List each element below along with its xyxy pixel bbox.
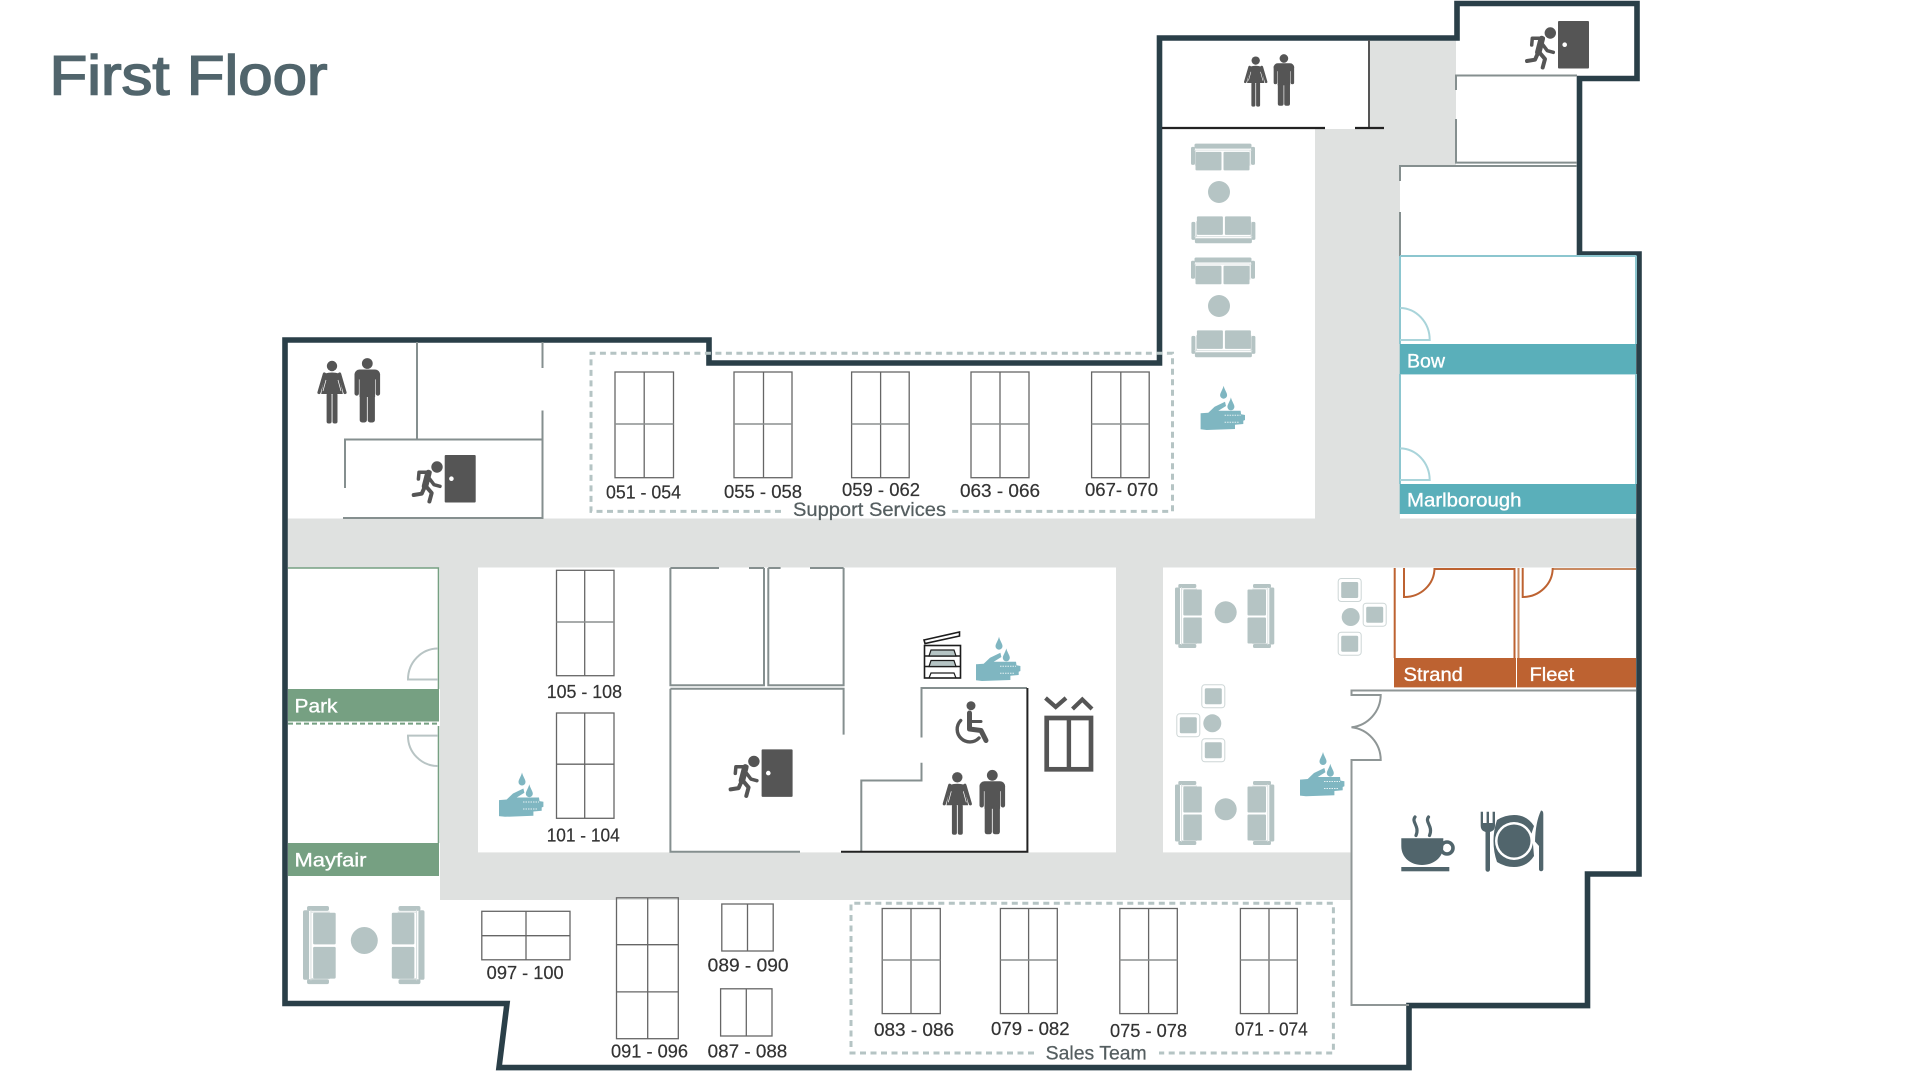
icon: man toilet top [1274, 54, 1294, 106]
sofa 2 [1191, 216, 1255, 243]
panel: room Park [288, 568, 439, 722]
panel: desks 097 - 100 [482, 911, 570, 983]
panel: room Mayfair [288, 726, 439, 876]
desks 051 - 054 [615, 372, 674, 478]
divider [288, 723, 438, 725]
panel: desks 105 - 108 [547, 570, 622, 702]
icon: woman toilet top [1245, 56, 1266, 107]
panel: top toilets [1162, 40, 1384, 128]
icon: plate and cutlery [1481, 810, 1543, 872]
icon: wheelchair [957, 701, 986, 742]
room name: Park [294, 696, 338, 718]
panel: desks 091 - 096 [611, 898, 688, 1062]
band [1400, 484, 1636, 514]
door [408, 648, 438, 680]
door [1523, 568, 1553, 597]
door [1400, 308, 1430, 340]
panel: central rooms [670, 568, 1027, 852]
room name: Strand [1404, 664, 1463, 686]
room name: Bow [1407, 350, 1446, 372]
panel: desks 089 - 090 [708, 904, 788, 976]
heading: Sales Team: Sales Team [1046, 1044, 1147, 1064]
table [1215, 601, 1237, 623]
panel: room Fleet [1517, 568, 1636, 687]
label: 105 - 108 [547, 682, 622, 702]
icon: copier [924, 632, 960, 678]
sofa [1175, 584, 1202, 648]
panel: Support Services [591, 353, 1172, 521]
sofa right [392, 906, 424, 984]
icon: emergency exit centre [731, 749, 793, 797]
room name: Mayfair [294, 850, 367, 872]
label 055 - 058: 055 - 058 [724, 482, 802, 502]
icon: lift [1046, 698, 1092, 769]
heading: Support Services: Support Services [793, 500, 946, 521]
band [1400, 344, 1636, 374]
icon: hand wash column [1201, 386, 1245, 430]
panel: east breakout [1175, 578, 1386, 845]
icon: hand wash left [499, 772, 543, 817]
label 063 - 066: 063 - 066 [960, 481, 1040, 501]
desks 055 - 058 [734, 372, 792, 478]
door [408, 736, 438, 766]
icon: woman toilet [319, 361, 345, 424]
sofa 4 [1191, 330, 1255, 357]
icon: hand wash east [1300, 752, 1344, 796]
desks 059 - 062 [852, 372, 909, 478]
icon: emergency exit top right [1527, 21, 1589, 68]
desks 063 - 066 [971, 372, 1029, 478]
chair cluster upper [1338, 578, 1386, 655]
panel: lower left sofas [303, 906, 424, 984]
icon: woman toilet centre [944, 772, 970, 835]
band [1517, 658, 1636, 687]
icon: man toilet centre [980, 770, 1005, 834]
chair cluster lower [1177, 685, 1225, 762]
label: 089 - 090 [708, 956, 788, 976]
label 067- 070: 067- 070 [1085, 480, 1158, 500]
panel: room Bow [1400, 256, 1636, 374]
label: 101 - 104 [547, 826, 620, 846]
label: 087 - 088 [708, 1042, 787, 1062]
room name: Fleet [1530, 664, 1575, 686]
label 079 - 082: 079 - 082 [991, 1019, 1070, 1039]
label 083 - 086: 083 - 086 [874, 1020, 954, 1040]
panel: room Strand [1394, 568, 1516, 687]
label 071 - 074: 071 - 074 [1235, 1020, 1308, 1040]
icon: man toilet [354, 358, 380, 422]
icon: emergency exit [414, 455, 476, 502]
band [288, 843, 439, 876]
sofa 3 [1191, 258, 1255, 284]
desks 071 - 074 [1240, 908, 1297, 1014]
label 051 - 054: 051 - 054 [606, 482, 681, 502]
door [1400, 448, 1430, 480]
desks 075 - 078 [1120, 908, 1177, 1014]
corridors [288, 40, 1637, 900]
table 1 [1208, 181, 1230, 203]
room outlines upper right [1400, 76, 1577, 256]
sofa [1175, 781, 1202, 845]
label: 091 - 096 [611, 1042, 688, 1062]
outer wall [285, 4, 1639, 1068]
icon: hand wash centre [976, 637, 1020, 681]
label 075 - 078: 075 - 078 [1110, 1021, 1187, 1041]
room name: Marlborough [1407, 490, 1522, 512]
label: 097 - 100 [487, 963, 564, 983]
label 059 - 062: 059 - 062 [842, 480, 920, 500]
panel: desks 101 - 104 [547, 713, 620, 846]
table [351, 927, 378, 954]
desks 079 - 082 [1000, 908, 1057, 1014]
sofa 1 [1191, 144, 1255, 170]
icon: coffee cup [1401, 817, 1453, 871]
sofa [1248, 781, 1274, 845]
desks 067 - 070 [1092, 372, 1149, 478]
door [1404, 568, 1434, 597]
panel: breakout column sofas [1191, 144, 1255, 357]
sofa left [303, 906, 336, 984]
panel: upper left toilets and exit room [319, 342, 542, 518]
panel: restaurant [1352, 690, 1636, 1005]
panel: desks 087 - 088 [708, 989, 787, 1062]
title: First Floor [50, 44, 328, 106]
table 2 [1208, 295, 1230, 317]
table [1215, 798, 1237, 820]
band [1394, 658, 1516, 687]
band [288, 689, 439, 722]
sofa [1248, 584, 1274, 648]
panel: Sales Team [851, 903, 1333, 1064]
desks 083 - 086 [882, 908, 940, 1014]
panel: room Marlborough [1400, 374, 1636, 514]
